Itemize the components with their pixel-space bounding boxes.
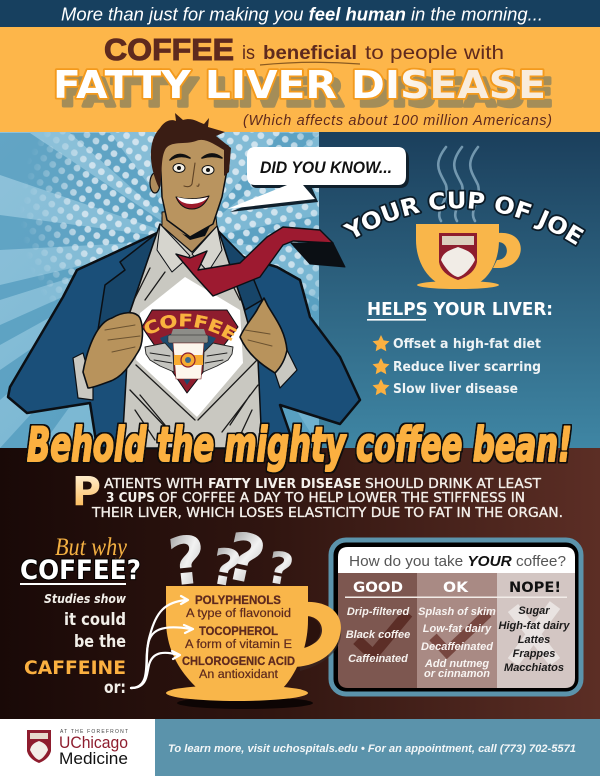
subheading: helps your liver: HELPS YOUR LIVER:	[367, 299, 553, 320]
paragraph: SHOULD DRINK AT LEAST	[365, 477, 541, 492]
panel: how do you take your coffee: How do you take YOUR coffee?	[349, 553, 566, 570]
but why coffee text block: But why	[55, 534, 128, 561]
ear	[150, 173, 160, 193]
arrows from or: to compounds	[131, 596, 193, 688]
coffee arched label: COFFEE	[144, 314, 237, 341]
logo wordmark	[59, 729, 128, 768]
illustration: superhero man	[6, 113, 362, 450]
bare chest T-shirt	[136, 277, 243, 417]
footer	[0, 719, 600, 776]
column: nope	[497, 573, 575, 688]
column: ok	[417, 573, 497, 688]
panel: right blue	[319, 132, 600, 448]
column: ok: or cinnamon	[424, 668, 490, 680]
subheading: (Which affects about 100 million Americans)	[243, 113, 552, 129]
question marks: ?	[263, 542, 297, 597]
question marks: ?	[218, 517, 272, 600]
shirt	[122, 224, 262, 448]
question marks: ?	[207, 537, 245, 599]
large coffee cup with compounds	[166, 586, 341, 709]
column: good: Black coffee	[346, 629, 410, 641]
column: nope: NOPE!	[509, 580, 561, 596]
but why coffee text block: or:	[104, 678, 126, 697]
panel: lower brown	[0, 448, 600, 719]
paragraph	[72, 469, 563, 521]
icon: star	[372, 335, 390, 351]
smile	[176, 196, 209, 209]
icon: coffee steam	[438, 147, 479, 221]
wings	[145, 343, 233, 372]
jacket	[8, 230, 360, 448]
coffee cup to go	[168, 329, 208, 379]
compound labels: CHLOROGENIC ACID	[182, 656, 295, 668]
but why coffee text block: COFFEE?	[20, 555, 141, 586]
compound labels: A form of vitamin E	[185, 639, 292, 651]
headline: coffee is beneficial: to people with	[365, 42, 504, 64]
column: good: Drip-filtered	[347, 606, 409, 618]
logo: UChicago Medicine crest	[27, 730, 51, 763]
crest	[439, 233, 477, 280]
paragraph: FATTY LIVER DISEASE	[208, 477, 361, 492]
column: ok: Low-fat dairy	[423, 623, 492, 635]
column: nope: Lattes	[518, 634, 550, 646]
top banner	[0, 0, 600, 27]
benefits list: Reduce liver scarring	[393, 359, 541, 375]
paragraph: 3 CUPS	[106, 491, 155, 506]
curved heading: your cup of joe: YOUR CUP OF JOE	[340, 190, 586, 247]
compound labels	[182, 595, 295, 681]
benefits list: Offset a high-fat diet	[393, 336, 541, 352]
icon: UChicago coffee cup	[416, 224, 521, 289]
shield emblem	[142, 310, 238, 394]
paragraph: ATIENTS WITH	[104, 477, 203, 492]
headline panel	[0, 27, 600, 133]
contact line: To learn more, visit uchospitals.edu • For an appointment, call (773) 702-5571	[168, 743, 576, 755]
column: ok: OK	[443, 580, 469, 596]
but why coffee text block: be the	[74, 632, 126, 651]
compound labels: An antioxidant	[199, 669, 279, 681]
column: ok: Decaffeinated	[421, 641, 493, 653]
but why coffee text block: it could	[64, 610, 126, 629]
hair	[151, 113, 231, 188]
eyes and brows	[170, 154, 222, 187]
column: nope: Sugar	[518, 605, 550, 617]
column: good: Caffeinated	[348, 653, 408, 665]
but why coffee text block	[20, 534, 141, 697]
compound labels: TOCOPHEROL	[199, 626, 278, 638]
head	[160, 132, 228, 237]
logo wordmark: AT THE FOREFRONT	[60, 729, 128, 735]
panel: sunburst background	[0, 132, 320, 448]
column: ok: Splash of skim	[418, 606, 496, 618]
but why coffee text block: CAFFEINE	[24, 657, 126, 679]
headline: coffee is beneficial: COFFEE	[104, 32, 234, 67]
headline: coffee is beneficial	[104, 32, 504, 67]
icon: star	[372, 379, 390, 395]
column: nope: High-fat dairy	[499, 620, 570, 632]
column: nope: Frappes	[513, 648, 555, 660]
benefits list	[372, 335, 541, 397]
flying red tie	[176, 227, 345, 296]
neck	[162, 208, 217, 252]
benefits list: Slow liver disease	[393, 381, 518, 397]
drop cap: P	[72, 469, 101, 515]
hand left	[73, 313, 142, 400]
speech bubble: DID YOU KNOW...	[260, 158, 392, 177]
compound labels: POLYPHENOLS	[195, 595, 281, 607]
column: nope: Macchiatos	[504, 662, 564, 674]
question marks: ?	[164, 521, 210, 602]
hand right	[240, 298, 297, 388]
but why coffee text block: Studies show	[44, 592, 127, 606]
speech bubble	[227, 147, 409, 212]
headline: coffee is beneficial: is	[242, 43, 255, 64]
column: good	[338, 573, 417, 688]
paragraph: OF COFFEE A DAY TO HELP LOWER THE STIFFNESS IN	[159, 491, 525, 506]
logo wordmark: Medicine	[59, 750, 128, 768]
column: good: GOOD	[353, 580, 403, 596]
top banner: More than just for making you feel human in the morning...	[61, 4, 543, 24]
headline: coffee is beneficial: beneficial	[263, 42, 357, 64]
panel: how do you take your coffee	[331, 540, 581, 694]
headline: fatty liver disease: FATTY LIVER DISEASE	[53, 63, 546, 108]
icon: star	[372, 358, 390, 374]
logo wordmark: UChicago	[59, 734, 128, 752]
compound labels: A type of flavonoid	[186, 608, 291, 620]
paragraph: THEIR LIVER, WHICH LOSES ELASTICITY DUE TO FAT IN THE ORGAN.	[91, 506, 563, 521]
column: ok: Add nutmeg	[424, 658, 489, 670]
question marks	[164, 517, 297, 602]
